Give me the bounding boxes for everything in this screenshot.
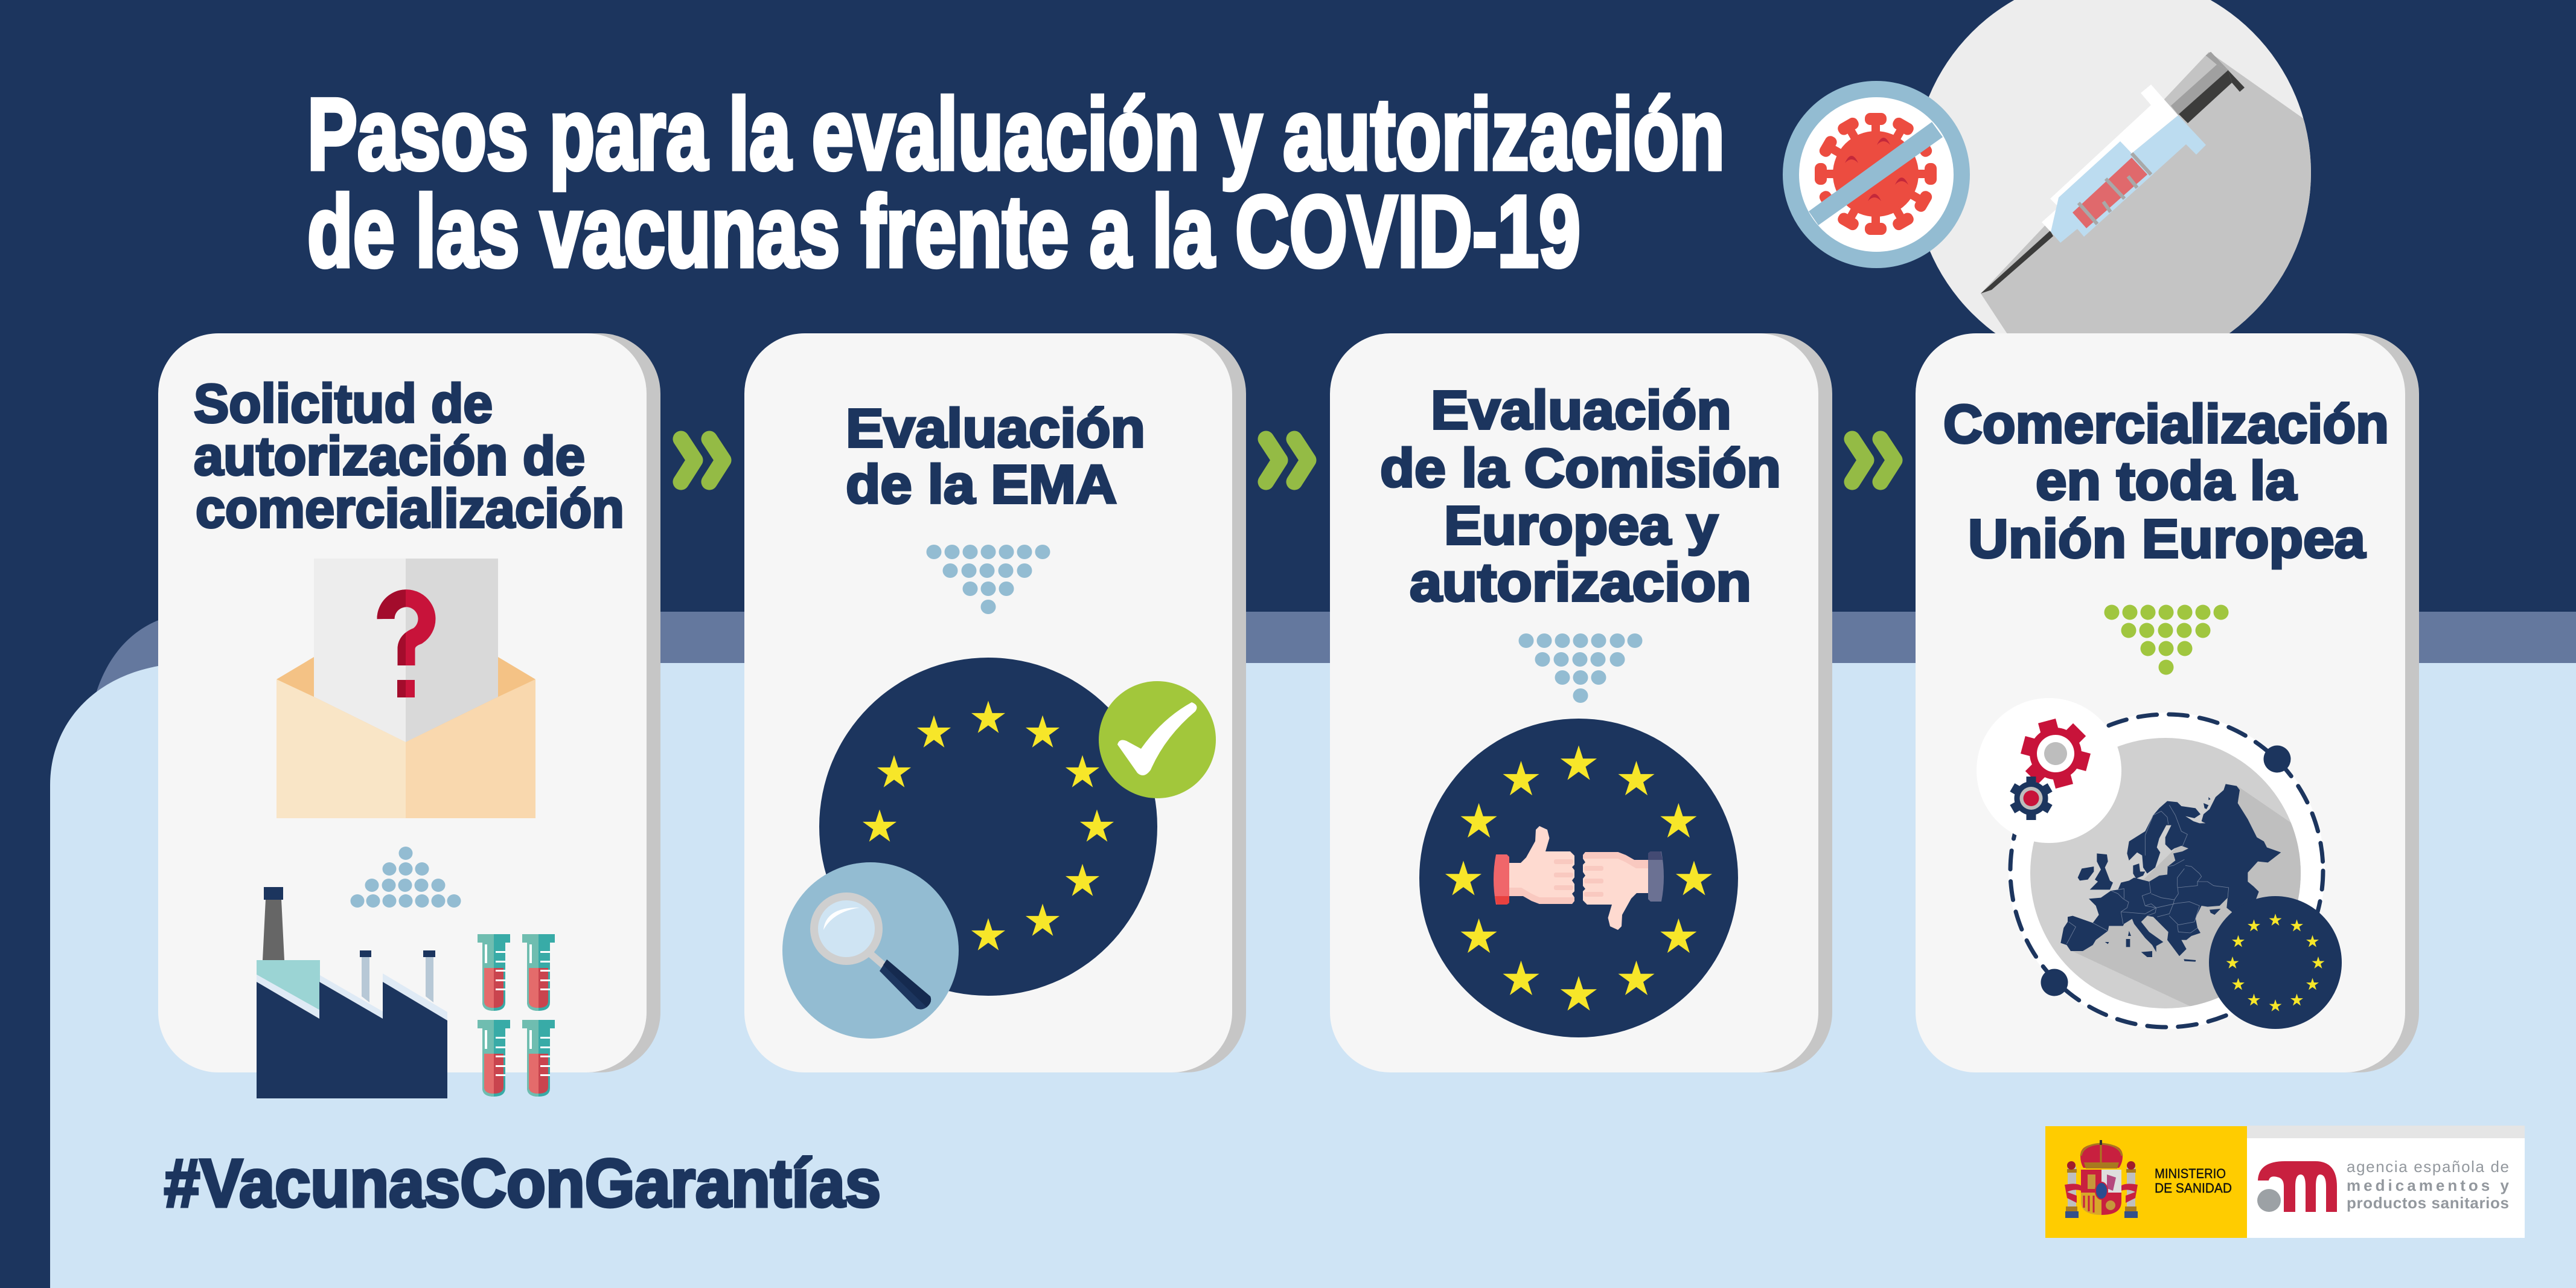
arrow: chevrons 1 [681,439,723,482]
icon: green dots pointing down [2105,605,2229,675]
logo: Ministerio de Sanidad [2045,1126,2247,1238]
icon: dots pointing down [926,545,1050,614]
text: agency name: agencia española de [2347,1158,2509,1176]
heading: card 4: Unión Europea [1968,509,2366,569]
heading: card 2: de la EMA [846,455,1117,515]
icon: EU flag circle with stars [1419,719,1738,1037]
map: Europe [2060,784,2281,962]
panel: card 3 Comisión Europea [1330,333,1832,1072]
heading: card 1: comercialización [196,479,624,539]
heading: card 2: Evaluación [846,399,1145,459]
title [307,77,1725,288]
icon: syringe in circle [1928,0,2311,333]
title: de las vacunas frente a la COVID-19 [307,175,1580,288]
icon: Europe globe with ring [2008,713,2325,1029]
icon: small EU flag [2209,896,2342,1029]
arrow: chevrons 3 [1852,439,1894,482]
text: Ministerio de Sanidad: DE SANIDAD [2155,1181,2232,1196]
heading: card 3: Evaluación [1431,380,1731,441]
panel: card 4 comercialización [1916,333,2419,1072]
background band [97,612,2576,725]
icon: thumb down hand [1583,851,1664,930]
heading: card 3: Europea y [1444,496,1718,556]
text: Ministerio de Sanidad: MINISTERIO [2155,1166,2226,1181]
icon: green check [1099,681,1216,798]
icon: dots pointing down [1519,633,1642,703]
text: agency name [2347,1158,2510,1212]
heading: card 3: de la Comisión [1380,438,1781,499]
heading: card 2 [846,399,1145,515]
icon: envelope with question mark [276,559,535,818]
icon: EU flag circle [819,658,1157,996]
panel: card 2 evaluación EMA [744,333,1246,1072]
icon: factory [257,887,447,1098]
panel: card 1 solicitud [158,333,660,1098]
icon: am mark [2257,1161,2337,1212]
heading: card 1: autorización de [194,426,585,487]
text: agency name: productos sanitarios [2347,1194,2509,1212]
background panel: light blue [50,663,2576,1288]
arrow: chevrons 2 [1266,439,1308,482]
icon: gears [1977,698,2121,843]
heading: card 3 [1380,380,1781,613]
logo: AEMPS [2247,1126,2525,1238]
hashtag: #VacunasConGarantías [164,1145,881,1221]
heading: card 4 [1943,394,2389,569]
heading: card 4: en toda la [2036,451,2297,511]
icon: thumb up hand [1494,826,1574,905]
heading: card 1 [194,374,624,539]
heading: card 1: Solicitud de [194,374,493,434]
icon: test tubes [478,934,555,1097]
icon: coat of arms [2065,1140,2138,1218]
text: agency name: medicamentos y [2347,1176,2510,1194]
icon: crossed-out virus badge [1791,89,1962,260]
icon: magnifier [782,862,959,1039]
heading: card 4: Comercialización [1943,394,2389,455]
icon: dots pointing up [350,847,461,908]
heading: card 3: autorizacion [1410,553,1751,613]
text: Ministerio de Sanidad [2155,1166,2232,1196]
title: Pasos para la evaluación y autorización [307,77,1725,191]
